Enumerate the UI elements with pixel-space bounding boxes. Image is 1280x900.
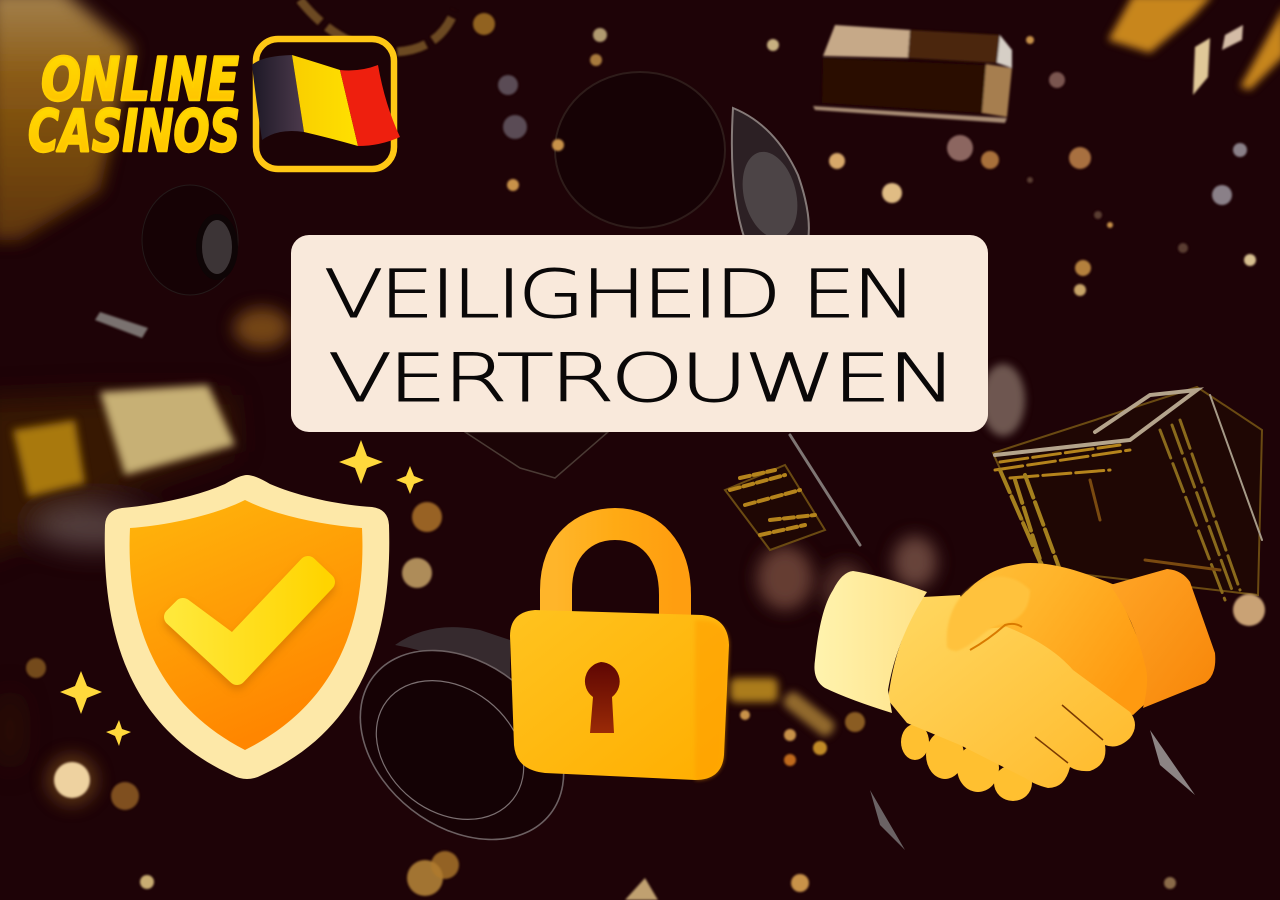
title text: VEILIGHEID EN	[324, 256, 913, 333]
left hand	[888, 595, 1135, 788]
title text: VERTROUWEN	[328, 340, 953, 417]
logo wordmark: CASINOS	[28, 97, 240, 165]
background: stacked block top	[813, 25, 1243, 123]
background: soft bokeh patches	[0, 0, 937, 806]
padlock side shading	[695, 620, 729, 780]
icon: handshake	[814, 563, 1215, 801]
logo wordmark: ONLINE	[41, 45, 239, 115]
right cuff	[1110, 569, 1215, 708]
thumb	[947, 577, 1030, 651]
left cuff	[814, 571, 927, 713]
right arm	[947, 563, 1160, 715]
check mark shadow	[173, 570, 326, 681]
logo	[28, 39, 400, 169]
icon: shield with check mark	[105, 475, 389, 779]
check mark	[173, 565, 326, 676]
background: blurred glows	[0, 395, 235, 770]
icon: padlock	[510, 524, 729, 780]
icons: sparkles	[60, 440, 424, 746]
title panel	[291, 235, 988, 432]
background: glass dice outlines	[465, 387, 1262, 600]
keyhole	[585, 662, 620, 733]
logo badge with Belgian flag	[252, 39, 400, 169]
title text	[324, 256, 953, 417]
back fingers	[901, 724, 1032, 801]
logo wordmark	[28, 45, 240, 165]
thumb crease	[970, 624, 1022, 650]
finger creases	[1035, 705, 1103, 763]
